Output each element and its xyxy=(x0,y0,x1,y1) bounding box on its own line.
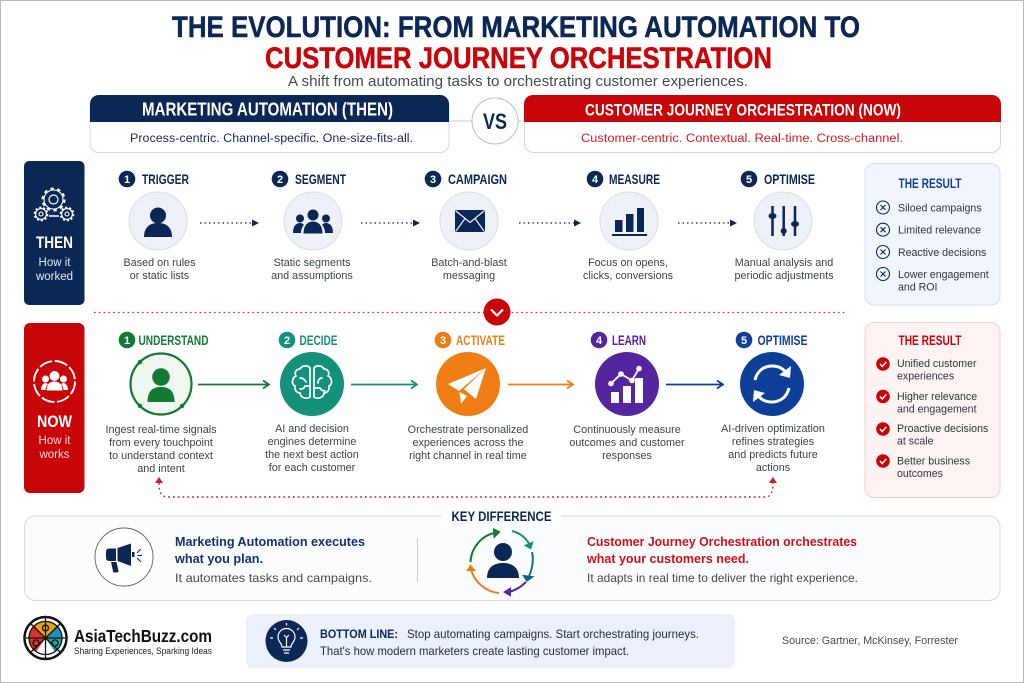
icon: customer with signals xyxy=(138,360,184,408)
vs badge: VS xyxy=(483,109,507,134)
result items now: Higher relevance xyxy=(897,391,977,403)
step: learn: responses xyxy=(602,450,653,462)
step: campaign: 3 xyxy=(430,174,436,186)
step: trigger: Based on rules xyxy=(123,257,196,269)
icon: megaphone xyxy=(106,544,142,572)
result items then: Siloed campaigns xyxy=(898,202,982,214)
step: optimise then: OPTIMISE xyxy=(764,171,815,187)
result items then: Lower engagement xyxy=(898,269,989,281)
step: campaign xyxy=(425,171,507,282)
panel: now label: How it xyxy=(39,435,71,447)
arrow: segment to campaign xyxy=(361,220,420,226)
step: activate: right channel in real time xyxy=(409,450,527,462)
step: understand: 1 xyxy=(124,335,130,347)
result items now: Unified customer xyxy=(897,358,977,370)
step: measure: 4 xyxy=(592,174,599,186)
panel: bottom line: BOTTOM LINE: xyxy=(320,627,398,641)
panel: customer journey orchestration now xyxy=(524,95,1001,152)
divider with chevron xyxy=(94,298,846,326)
panel: key difference: KEY DIFFERENCE xyxy=(452,509,552,524)
step: segment: SEGMENT xyxy=(295,171,346,187)
step: measure: Focus on opens, xyxy=(588,257,668,269)
step: understand: and intent xyxy=(137,463,185,475)
result items then xyxy=(876,201,989,293)
logo: asiatechbuzz: Sharing Experiences, Sparking Ideas xyxy=(74,646,212,656)
panel: then label: worked xyxy=(35,271,73,283)
panel: the result now xyxy=(865,322,1000,498)
arrow: trigger to segment xyxy=(200,220,259,226)
logo: asiatechbuzz: AsiaTechBuzz.com xyxy=(74,626,212,646)
arrow: learn to optimise xyxy=(666,384,723,386)
step: learn: LEARN xyxy=(612,333,646,348)
step: learn: outcomes and customer xyxy=(569,437,685,449)
step: activate: experiences across the xyxy=(412,437,524,449)
icon: envelope xyxy=(455,210,485,232)
result items now: at scale xyxy=(897,436,934,448)
step: campaign: Batch-and-blast xyxy=(431,257,507,269)
text: marketing automation statement: It automates tasks and campaigns. xyxy=(175,571,372,585)
step: decide xyxy=(265,332,359,474)
panel: then label: How it xyxy=(39,257,71,269)
step: learn xyxy=(569,332,685,462)
step: decide: AI and decision xyxy=(275,423,349,435)
step: trigger: or static lists xyxy=(130,270,190,282)
step: learn: 4 xyxy=(596,335,603,347)
step: activate: 3 xyxy=(440,335,446,347)
result items then: and ROI xyxy=(898,281,937,293)
step: segment: and assumptions xyxy=(271,270,353,282)
step: activate: Orchestrate personalized xyxy=(408,424,528,436)
step: decide: 2 xyxy=(284,335,290,347)
icon: group of people xyxy=(293,210,333,234)
panel: then label: THEN xyxy=(36,234,73,252)
subtitle: A shift from automating tasks to orchestrating customer experiences. xyxy=(288,74,748,90)
icon: people in cycle xyxy=(34,361,75,402)
icon: paper plane xyxy=(448,368,486,404)
panel: the result now: THE RESULT xyxy=(898,333,962,348)
text: marketing automation statement xyxy=(174,535,372,585)
step: optimise now: AI-driven optimization xyxy=(721,423,825,435)
icon: brain xyxy=(292,366,332,398)
step: activate xyxy=(408,332,528,462)
step: segment xyxy=(271,171,353,282)
step: trigger: TRIGGER xyxy=(142,171,189,187)
title xyxy=(172,11,860,75)
step: measure: clicks, conversions xyxy=(583,270,674,282)
step: activate: ACTIVATE xyxy=(456,333,505,348)
panel: customer journey orchestration now: Customer-centric. Contextual. Real-time. Cross-channel. xyxy=(581,133,903,145)
panel: now label: works xyxy=(38,449,70,461)
result items now: outcomes xyxy=(897,468,943,480)
source note: Source: Gartner, McKinsey, Forrester xyxy=(782,635,958,647)
icon: gears xyxy=(34,188,74,220)
step: measure xyxy=(583,171,674,282)
arrow: understand to decide xyxy=(198,384,269,386)
arrow: measure to optimise xyxy=(678,220,737,226)
step: optimise now: OPTIMISE xyxy=(758,333,808,348)
step: understand: from every touchpoint xyxy=(109,437,213,449)
logo: asiatechbuzz xyxy=(24,617,212,659)
title: CUSTOMER JOURNEY ORCHESTRATION xyxy=(265,42,772,75)
result items now: and engagement xyxy=(897,404,977,416)
text: orchestration statement: It adapts in real time to deliver the right experience. xyxy=(587,571,858,585)
icon: rising chart xyxy=(608,366,643,403)
vs badge xyxy=(449,98,524,144)
text: marketing automation statement: what you plan. xyxy=(174,552,263,566)
step: decide: the next best action xyxy=(265,449,359,461)
panel: marketing automation then: Process-centric. Channel-specific. One-size-fits-all. xyxy=(130,133,413,145)
step: understand: Ingest real-time signals xyxy=(105,424,217,436)
step: trigger xyxy=(119,171,196,282)
text: orchestration statement xyxy=(586,535,858,585)
panel: bottom line: Stop automating campaigns. Start orchestrating journeys. xyxy=(407,627,699,641)
step: decide: engines determine xyxy=(268,436,356,448)
panel: bottom line: That's how modern marketers create lasting customer impact. xyxy=(320,644,629,658)
icon: customer journey cycle xyxy=(468,530,533,595)
step: learn: Continuously measure xyxy=(573,424,681,436)
icon: refresh arrows xyxy=(753,366,791,402)
step: decide: for each customer xyxy=(269,462,356,474)
step: optimise now: actions xyxy=(756,462,791,474)
step: optimise now: refines strategies xyxy=(732,436,815,448)
text: orchestration statement: Customer Journey Orchestration orchestrates xyxy=(587,535,857,549)
panel: the result then xyxy=(865,164,1000,305)
step: optimise then: 5 xyxy=(746,174,752,186)
step: campaign: CAMPAIGN xyxy=(448,171,507,187)
step: optimise now xyxy=(721,332,825,474)
step: optimise then: Manual analysis and xyxy=(735,257,833,269)
step: campaign: messaging xyxy=(443,270,495,282)
panel: marketing automation then xyxy=(90,95,449,152)
step: trigger: 1 xyxy=(124,174,130,186)
panel: now label: NOW xyxy=(37,412,73,431)
icon: person xyxy=(144,208,172,237)
step: optimise now: 5 xyxy=(741,335,747,347)
panel: now label xyxy=(24,323,84,493)
arrow: campaign to measure xyxy=(519,220,581,226)
icon: bar chart xyxy=(612,208,647,236)
step: segment: 2 xyxy=(277,174,283,186)
panel: customer journey orchestration now: CUSTOMER JOURNEY ORCHESTRATION (NOW) xyxy=(585,102,901,120)
panel: then label xyxy=(24,161,84,305)
result items then: Reactive decisions xyxy=(898,247,986,259)
feedback loop arrow xyxy=(155,477,777,497)
step: decide: DECIDE xyxy=(300,333,338,348)
text: orchestration statement: what your customers need. xyxy=(586,552,749,566)
result items now: Better business xyxy=(897,456,970,468)
step: measure: MEASURE xyxy=(609,171,660,187)
text: marketing automation statement: Marketing Automation executes xyxy=(175,535,365,549)
icon: light bulb xyxy=(270,623,303,653)
step: segment: Static segments xyxy=(274,257,351,269)
step: understand: to understand context xyxy=(109,450,213,462)
panel: marketing automation then: MARKETING AUTOMATION (THEN) xyxy=(142,100,393,120)
step: optimise then: periodic adjustments xyxy=(734,270,834,282)
icon: sliders xyxy=(770,206,798,236)
panel: bottom line xyxy=(246,614,735,668)
panel: key difference xyxy=(24,508,1000,600)
result items now xyxy=(876,357,988,480)
arrow: decide to activate xyxy=(351,384,417,386)
step: understand xyxy=(105,332,217,475)
step: optimise now: and predicts future xyxy=(728,449,818,461)
panel: the result then: THE RESULT xyxy=(898,176,962,191)
step: optimise then xyxy=(734,171,834,282)
result items now: Proactive decisions xyxy=(897,423,988,435)
title: THE EVOLUTION: FROM MARKETING AUTOMATION TO xyxy=(172,11,860,44)
step: understand: UNDERSTAND xyxy=(138,333,209,348)
arrow: activate to learn xyxy=(508,384,573,386)
result items then: Limited relevance xyxy=(898,224,981,236)
result items now: experiences xyxy=(897,370,954,382)
